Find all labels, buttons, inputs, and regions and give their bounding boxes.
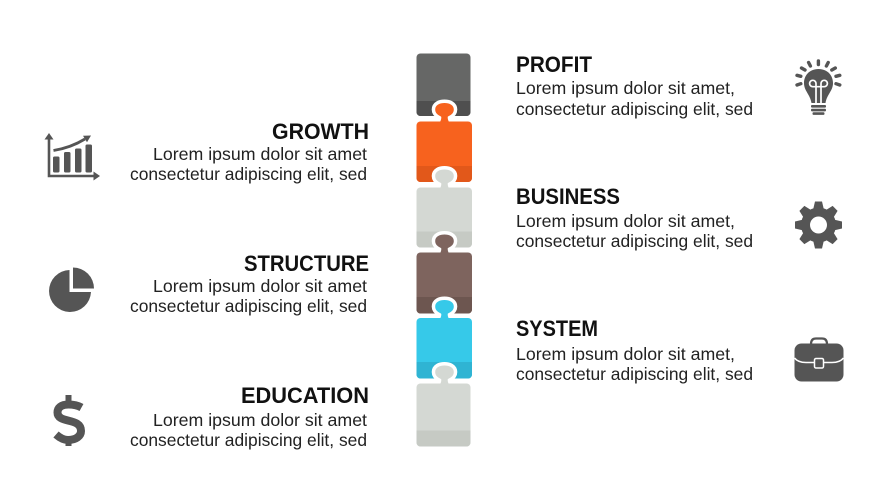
text block: profit: consectetur adipiscing elit, sed (516, 99, 753, 119)
text block: system: Lorem ipsum dolor sit amet, (516, 344, 735, 364)
text block: business: Lorem ipsum dolor sit amet, (516, 211, 735, 231)
puzzle piece: blue (416, 300, 472, 378)
text block: education: consectetur adipiscing elit, sed (130, 430, 367, 450)
icon: growth chart (44, 133, 100, 180)
puzzle piece: pale grey (416, 366, 470, 446)
text block: business: BUSINESS (516, 184, 620, 209)
text block: system: SYSTEM (516, 316, 598, 341)
text block: growth: Lorem ipsum dolor sit amet (153, 144, 367, 164)
text block: system: consectetur adipiscing elit, sed (516, 364, 753, 384)
puzzle piece: dark grey (416, 54, 470, 116)
knob outline: blue (435, 300, 454, 319)
puzzle column (416, 54, 472, 446)
text block: structure (130, 251, 369, 316)
icon: pie chart (49, 268, 94, 312)
puzzle piece: light grey (416, 170, 472, 248)
text block: system (516, 316, 753, 384)
text block: education: EDUCATION (241, 383, 369, 408)
knob outline: pale grey (435, 366, 454, 384)
text block: education (130, 383, 369, 450)
text block: growth: consectetur adipiscing elit, sed (130, 164, 367, 184)
icon: gear (795, 202, 842, 248)
text block: education: Lorem ipsum dolor sit amet (153, 410, 367, 430)
icon: light bulb (797, 61, 840, 115)
knob outline: brown (435, 234, 454, 254)
text block: profit: Lorem ipsum dolor sit amet, (516, 78, 735, 98)
icon: briefcase (794, 338, 844, 382)
text block: structure: STRUCTURE (244, 251, 369, 276)
text block: business: consectetur adipiscing elit, sed (516, 231, 753, 251)
text block: growth: GROWTH (272, 119, 369, 144)
knob outline: light grey (435, 170, 454, 188)
knob outline: orange (435, 103, 454, 122)
text block: business (516, 184, 753, 251)
text block: profit: PROFIT (516, 52, 593, 77)
text block: structure: consectetur adipiscing elit, sed (130, 296, 367, 316)
puzzle piece: brown (416, 234, 472, 314)
puzzle piece: orange (416, 103, 472, 182)
text block: structure: Lorem ipsum dolor sit amet (153, 276, 367, 296)
text block: growth (130, 119, 369, 184)
text block: profit (516, 52, 753, 119)
icon: dollar sign (56, 395, 82, 446)
